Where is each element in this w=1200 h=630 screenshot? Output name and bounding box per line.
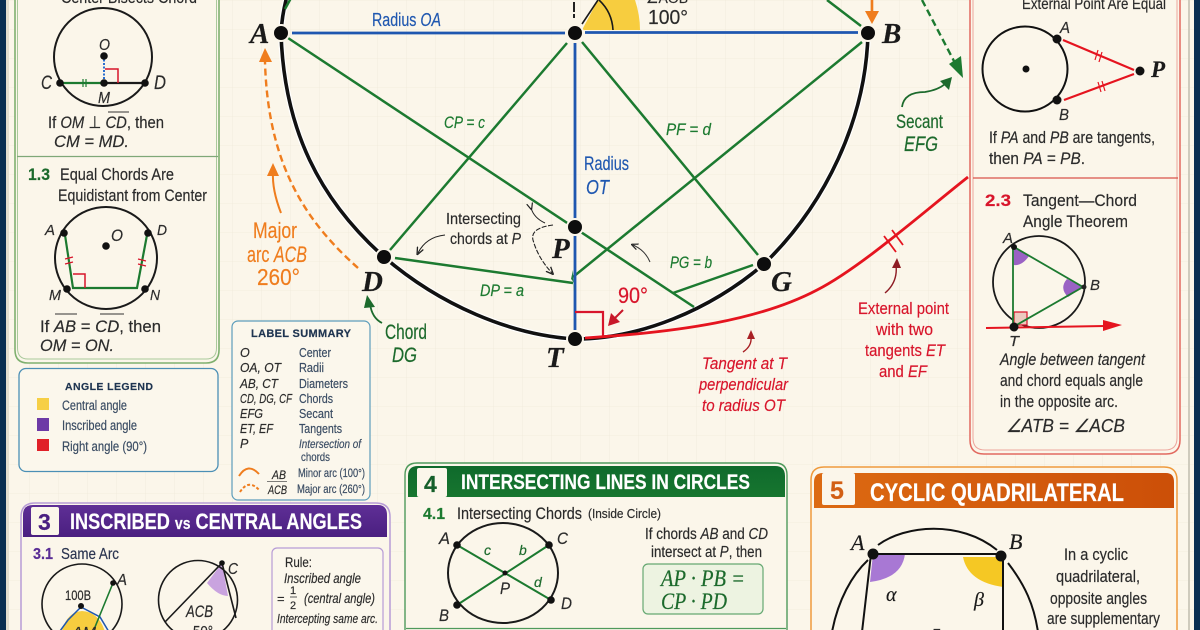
text: equal chords rule (40, 314, 161, 355)
heading: 3.1 same arc: Same Arc (61, 546, 119, 563)
diagram: intersecting chords (438, 523, 572, 625)
diagram: central angle: A (116, 572, 127, 589)
callout: major arc (247, 48, 358, 290)
heading: 1.3 equal chords: Equidistant from Center (58, 186, 207, 205)
diagram: inscribed angle (158, 560, 238, 630)
callout: rule: (central angle) (304, 590, 375, 606)
central angle wedge (574, 0, 640, 30)
icon: minor arc (239, 468, 259, 476)
callout: external point (858, 258, 949, 381)
panel: label summary: Diameters (299, 377, 348, 391)
text: bisect rule: CM = MD. (54, 132, 129, 151)
diagram: equal chords equidistant: N (150, 287, 160, 304)
diagram: intersecting chords: c (484, 542, 491, 558)
panel: section 2 tangents (970, 0, 1180, 454)
label: radius OT: OT (586, 177, 610, 199)
text: cyclic rule: quadrilateral, (1056, 568, 1140, 586)
diagram: two tangents from P: B (1059, 107, 1069, 124)
panel: label summary (232, 321, 370, 500)
panel: label summary: AB, CT (239, 377, 279, 391)
diagram: equal chords equidistant (44, 207, 167, 309)
heading: 4.1 intersecting chords: Intersecting Chords (457, 504, 582, 523)
panel: label summary: Secant (299, 407, 333, 421)
diagram: perpendicular from center bisects chord: M (98, 90, 111, 107)
panel: angle legend: ANGLE LEGEND (65, 381, 153, 393)
diagram: two tangents from P: A (1059, 20, 1070, 37)
diagram: equal chords equidistant: A (44, 222, 55, 239)
callout: external point: with two (875, 320, 933, 339)
callout: secant EFG: Secant (896, 112, 944, 133)
callout: rule (272, 548, 383, 630)
tangent line from T (585, 177, 968, 338)
legend item: inscribed angle: Inscribed angle (62, 418, 137, 433)
callout: chord DG: DG (392, 344, 417, 367)
diagram: intersecting chords: A (438, 529, 450, 548)
callout: intersecting chords at P: chords at P (450, 231, 521, 248)
heading: 4.1 intersecting chords: (Inside Circle) (588, 507, 661, 521)
header bar (814, 473, 1174, 508)
point labels: A (248, 18, 269, 50)
heading: 4.1 intersecting chords (423, 504, 661, 523)
text: tangent chord rule: ∠ATB = ∠ACB (1006, 416, 1125, 436)
panel: label summary: Radii (299, 361, 324, 375)
text: tangent chord rule: and chord equals angle (1000, 372, 1143, 390)
header bar: CYCLIC QUADRILATERAL (870, 479, 1124, 507)
circle outline (281, 0, 868, 339)
panel: label summary: LABEL SUMMARY (251, 328, 352, 340)
diagram: inscribed angle: ACB (185, 602, 213, 621)
diagram: equal chords equidistant: D (157, 222, 167, 239)
text: tangent chord rule (999, 351, 1146, 436)
panel: label summary: Intersection of (299, 437, 362, 451)
callout: intersecting chords at P (418, 208, 650, 273)
header bar: INTERSECTING LINES IN CIRCLES (461, 471, 750, 494)
diagram: perpendicular from center bisects chord: D (154, 73, 166, 94)
panel: angle legend (19, 368, 218, 472)
heading: 2.3 tangent-chord angle: 2.3 (985, 191, 1011, 210)
diagram: intersecting chords: b (519, 542, 527, 558)
point labels: B (881, 18, 901, 50)
heading: 2.3 tangent-chord angle: Angle Theorem (1023, 212, 1128, 231)
panel: label summary: Tangents (299, 422, 342, 436)
panel: label summary: ET, EF (240, 422, 274, 436)
point labels: G (771, 266, 792, 298)
central diagram: main circle (247, 0, 968, 415)
heading: 4.1 intersecting chords: 4.1 (423, 506, 445, 523)
text: equal chords rule: OM = ON. (40, 336, 114, 355)
label: radius OA: Radius OA (372, 10, 441, 30)
labels: chord segments: PF = d (666, 120, 711, 139)
header bar: INSCRIBED vs CENTRAL ANGLES (70, 509, 362, 534)
label: radius OT: Radius (584, 154, 629, 175)
panel: section 4 intersecting lines (405, 463, 787, 630)
point labels: T (546, 342, 565, 374)
callout: rule: Intercepting same arc. (277, 611, 378, 626)
legend item: right angle: Right angle (90°) (62, 439, 147, 454)
diagram: cyclic quadrilateral: A (849, 530, 865, 555)
callout: major arc: Major (253, 218, 297, 243)
panel: label summary: O (240, 346, 250, 360)
callout: rule: Inscribed angle (284, 570, 361, 586)
label: radius OT (584, 154, 629, 199)
legend item: central angle (37, 398, 127, 413)
icon: major arc (240, 485, 260, 492)
callout: external point: tangents ET (865, 341, 946, 360)
panel: label summary: P (240, 437, 249, 451)
diagram: cyclic quadrilateral: α (886, 584, 897, 606)
callout: rule: 2 (290, 600, 296, 612)
text: chords rule: If chords AB and CD (645, 526, 768, 543)
diagram: central angle (42, 564, 127, 630)
diagram: tangent chord angle: B (1090, 277, 1100, 294)
diagram: equal chords equidistant: M (49, 287, 61, 304)
label: 90 degrees (608, 283, 648, 326)
angle label: 100° (648, 7, 688, 29)
text: cyclic rule (1047, 546, 1161, 628)
diagram: perpendicular from center bisects chord (41, 8, 166, 107)
point labels (248, 18, 901, 374)
panel: label summary: EFG (240, 407, 263, 421)
callout: external point: External point (858, 299, 949, 318)
panel: label summary: chords (301, 450, 330, 464)
text: bisect rule (48, 112, 164, 151)
points (273, 25, 876, 347)
callout: secant EFG (896, 77, 952, 156)
legend item: inscribed angle (37, 418, 137, 433)
text: tangent chord rule: in the opposite arc. (1000, 393, 1118, 411)
diagram: equal chords equidistant: O (111, 226, 123, 245)
panel: label summary: Chords (299, 392, 333, 406)
diagram: tangent chord angle: A (1002, 230, 1013, 247)
panel: section 1 chord theorems (15, 0, 219, 363)
callout: major arc: 260° (257, 264, 300, 290)
arrow: minor arc to B (865, 0, 879, 24)
labels: chord segments: CP = c (444, 113, 485, 132)
callout: intersecting chords at P: Intersecting (446, 211, 521, 228)
callout: rule: Rule: (285, 554, 312, 570)
text: tangent rule: then PA = PB. (989, 150, 1085, 168)
callout: major arc: arc ACB (247, 242, 307, 267)
panel: label summary: Minor arc (100°) (298, 468, 365, 480)
panel: label summary: CD, DG, CF (240, 392, 293, 406)
green chords (285, 0, 862, 307)
text: tangent rule: If PA and PB are tangents, (989, 129, 1155, 147)
diagram: tangent chord angle (986, 230, 1122, 350)
callout: rule: = (277, 591, 285, 606)
header bar (408, 466, 785, 497)
text: cyclic rule: In a cyclic (1064, 546, 1128, 564)
callout: tangent at T: perpendicular (698, 375, 789, 394)
diagram: perpendicular from center bisects chord: C (41, 73, 52, 94)
blue radii (292, 32, 858, 330)
text: cyclic rule: are supplementary (1047, 610, 1161, 628)
panel: label summary: Center (299, 346, 331, 360)
legend item: central angle: Central angle (62, 398, 127, 413)
callout: chord formula: AP · PB = (659, 566, 745, 591)
diagram: two tangents from P (982, 20, 1166, 124)
text: bisect rule: If OM ⊥ CD, then (48, 113, 164, 132)
diagram: intersecting chords: C (557, 529, 569, 548)
diagram: two tangents from P: P (1150, 57, 1166, 82)
header bar (23, 505, 387, 537)
diagram: cyclic quadrilateral: B (1009, 529, 1022, 554)
diagram: intersecting chords: P (500, 579, 511, 598)
callout: tangent at T (698, 330, 789, 415)
header bar: 3 (38, 509, 51, 535)
panel: label summary: Major arc (260°) (297, 484, 365, 496)
panel: section 3 inscribed vs central (21, 503, 390, 630)
heading: 1.3 equal chords (28, 165, 207, 205)
text: cyclic rule: opposite angles (1050, 590, 1147, 608)
heading: 2.3 tangent-chord angle (985, 191, 1137, 231)
text: tangent rule (989, 129, 1155, 168)
callout: chord formula: CP · PD (661, 589, 727, 614)
diagram: central angle: 100B (65, 587, 91, 603)
heading: 3.1 same arc (33, 546, 119, 563)
diagram: intersecting chords: B (439, 606, 449, 625)
text: equal chords rule: If AB = CD, then (40, 317, 161, 336)
labels: chord segments: PG = b (670, 253, 712, 272)
text: chords rule (645, 526, 768, 561)
right angle marker at T (575, 312, 603, 336)
text: tangent chord rule: Angle between tangent (999, 351, 1146, 369)
label: 90 degrees: 90° (618, 283, 648, 308)
legend item: right angle (37, 439, 147, 454)
callout: tangent at T: to radius OT (702, 396, 786, 415)
callout: tangent at T: Tangent at T (702, 354, 788, 373)
labels: chord segments: DP = a (480, 281, 524, 300)
text: chords rule: intersect at P, then (651, 544, 762, 561)
diagram: cyclic quadrilateral (832, 529, 1038, 630)
callout: chord DG (364, 295, 427, 367)
panel: section 5 cyclic quadrilateral (811, 467, 1177, 630)
callout: external point: and EF (879, 362, 928, 381)
heading: 3.1 same arc: 3.1 (33, 546, 53, 563)
panel: label summary: OA, OT (240, 361, 282, 375)
panel: label summary: ACB (267, 483, 287, 497)
header bar: 5 (830, 477, 844, 505)
arrow: secant dashed (922, 0, 963, 78)
callout: rule: 1 (290, 585, 296, 597)
diagram: tangent chord angle: T (1009, 333, 1021, 350)
labels: chord segments (444, 113, 712, 300)
diagram: inscribed angle: C (228, 561, 238, 578)
point labels: P (551, 233, 570, 265)
point labels: D (361, 266, 383, 298)
callout: chord DG: Chord (385, 321, 427, 344)
heading: 1.3 equal chords: Equal Chords Are (60, 165, 174, 184)
diagram: intersecting chords: d (534, 574, 543, 590)
diagram: intersecting chords: D (561, 594, 572, 613)
diagram: perpendicular from center bisects chord: O (99, 37, 110, 54)
heading: 2.3 tangent-chord angle: Tangent—Chord (1023, 191, 1137, 210)
panel: label summary: AB (271, 468, 286, 482)
heading: 1.3 equal chords: 1.3 (28, 165, 50, 184)
header bar: 4 (424, 471, 437, 497)
callout: secant EFG: EFG (904, 133, 938, 156)
diagram: cyclic quadrilateral: β (973, 589, 984, 611)
callout: chord formula (643, 564, 763, 614)
